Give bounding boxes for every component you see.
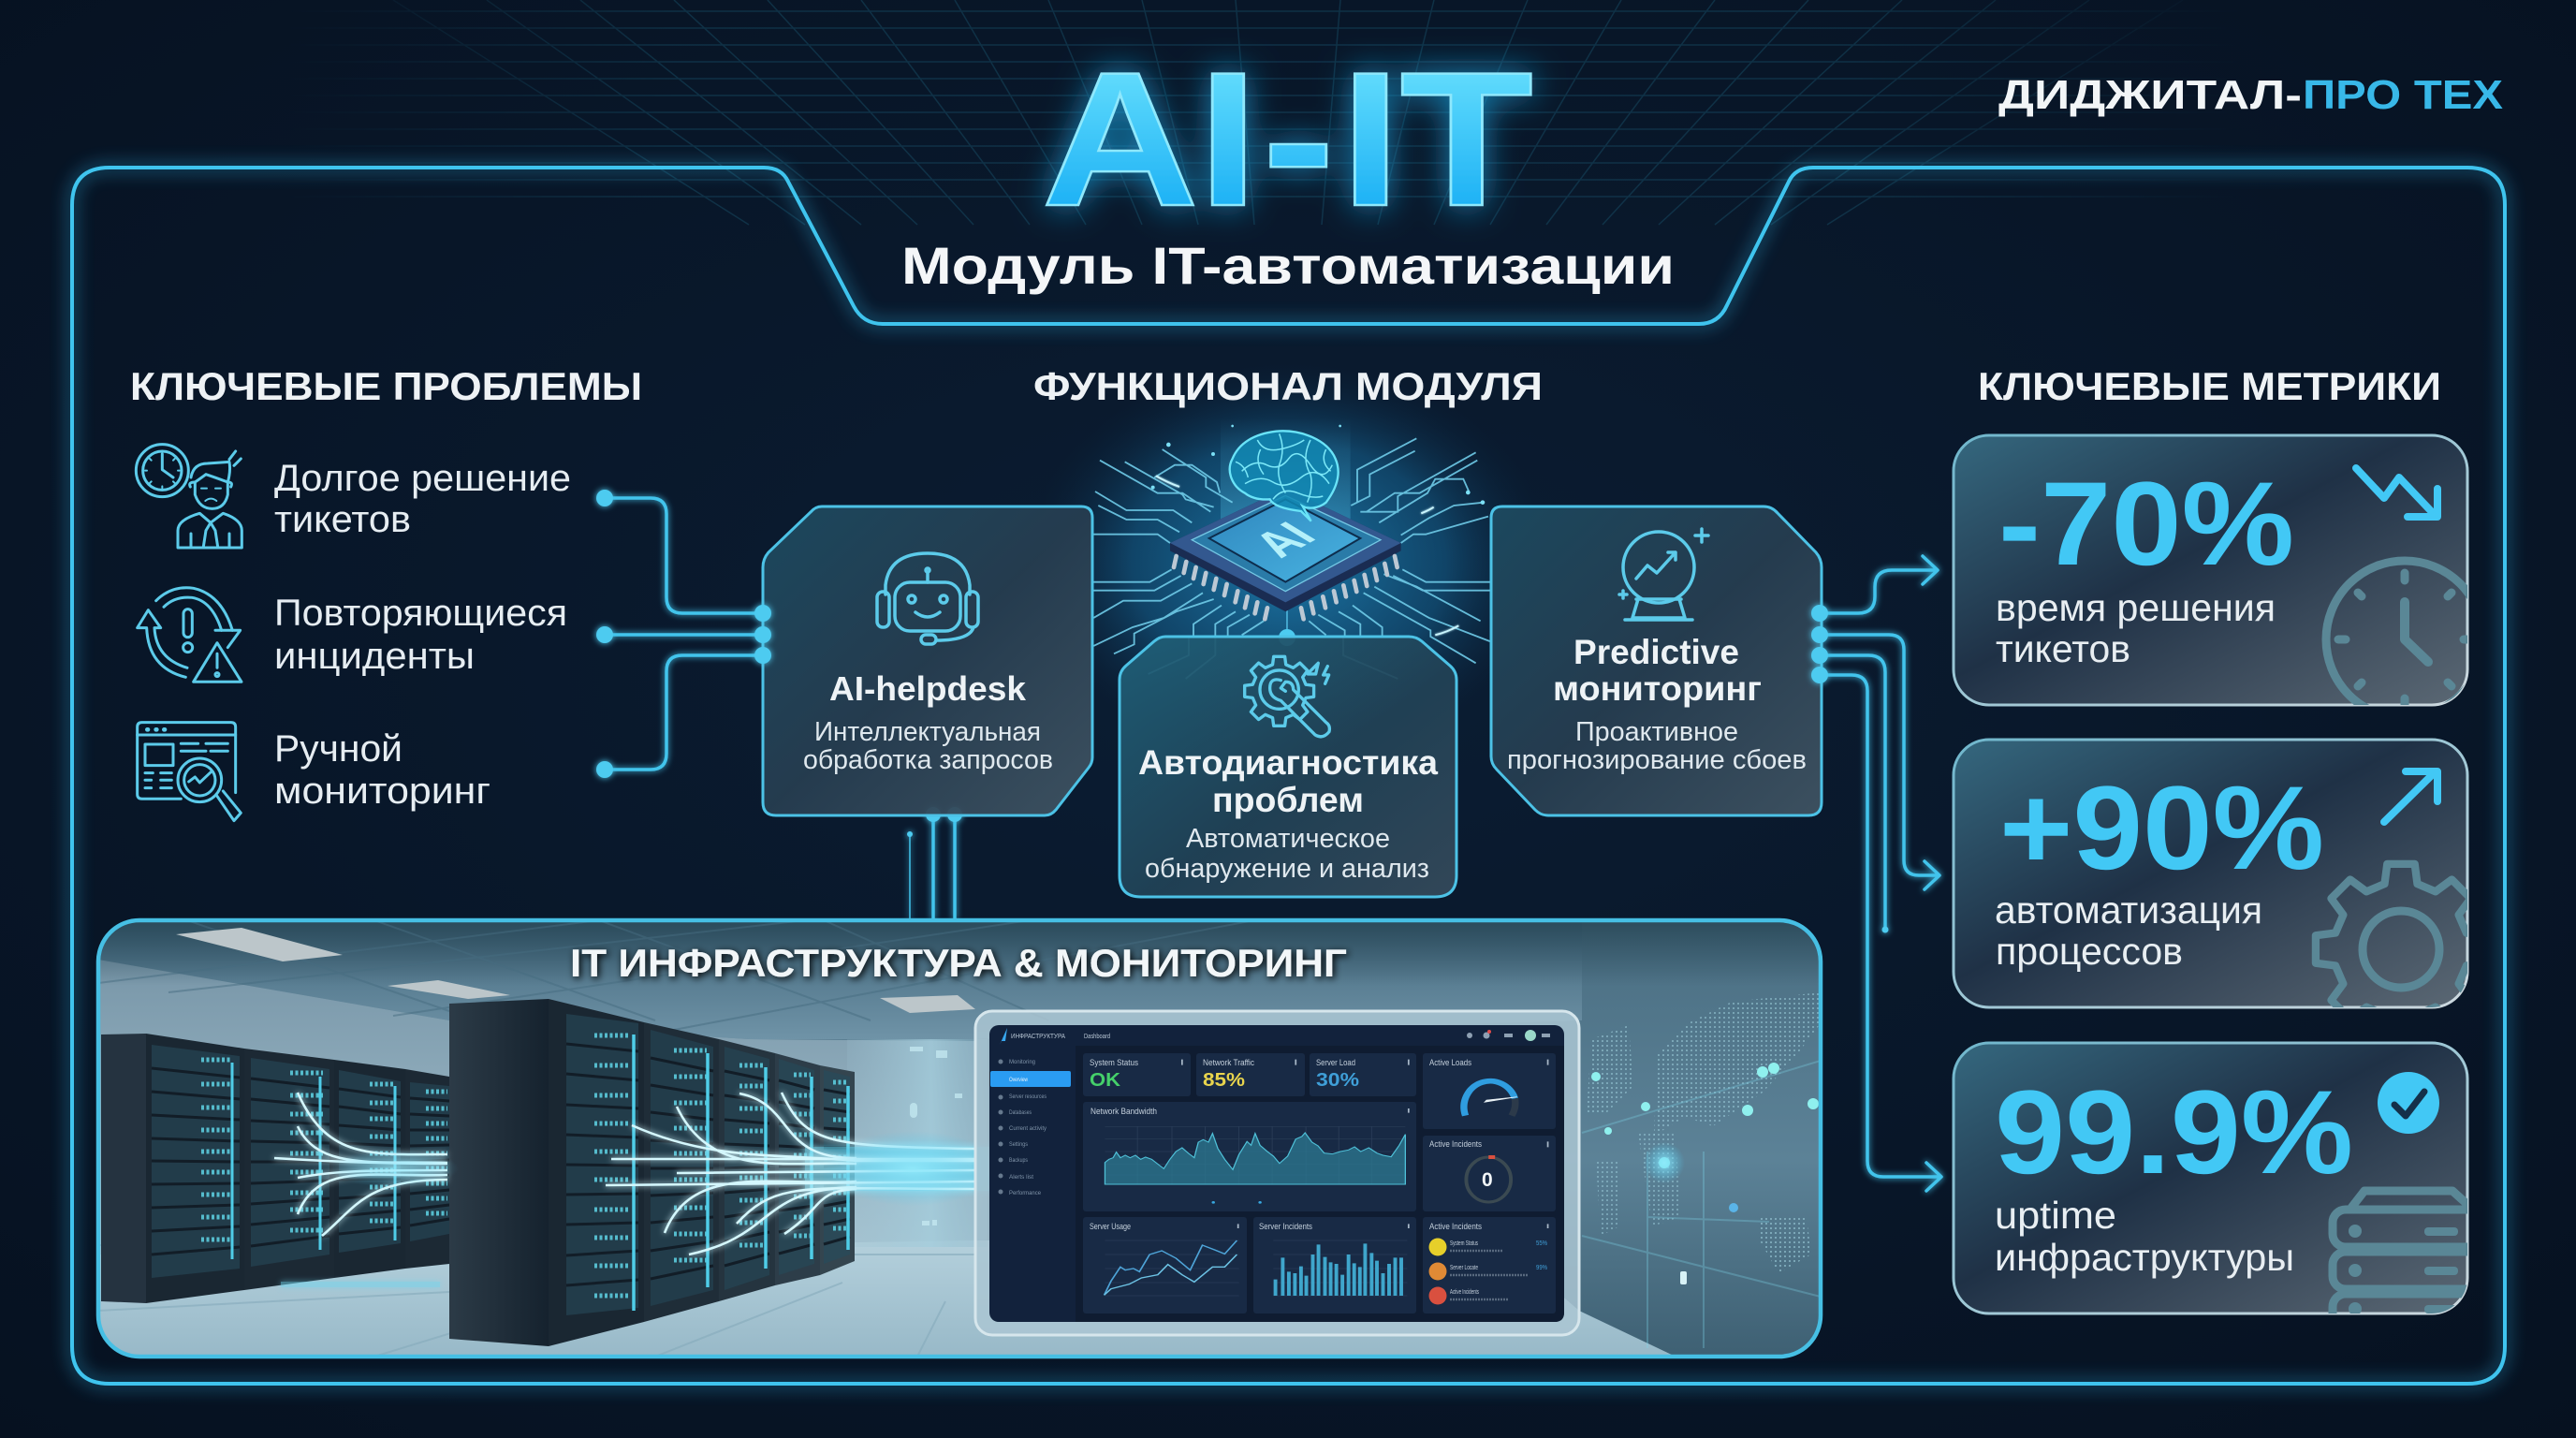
icon: crystal ball chart — [1619, 529, 1708, 620]
value: minus 70 percent: -70% — [1998, 457, 2294, 590]
text: manual monitoring: Ручной — [274, 728, 402, 770]
title: predictive monitoring: мониторинг — [1553, 669, 1762, 708]
dashboard sidebar: Current activity — [1009, 1125, 1047, 1132]
description: predictive monitoring: прогнозирование сбоев — [1507, 745, 1807, 775]
icon: manual monitoring — [138, 723, 241, 821]
data cables — [274, 1093, 975, 1255]
dashboard — [975, 1011, 1579, 1335]
main server row — [449, 999, 855, 1346]
icon: clock and frustrated person — [136, 445, 242, 548]
description: auto-diagnostics: обнаружение и анализ — [1145, 854, 1429, 884]
dashboard labels: Active Incidents — [1429, 1222, 1482, 1231]
dashboard labels: System Status — [1090, 1058, 1138, 1067]
dashboard sidebar: Settings — [1009, 1141, 1029, 1148]
metric card: automation — [1953, 738, 2469, 1009]
left server row — [101, 1034, 449, 1303]
dashboard incident list: 99% — [1536, 1263, 1547, 1271]
icon: recurring incidents — [138, 588, 242, 682]
dashboard sidebar: Server resources — [1009, 1093, 1047, 1100]
illustration: AI chip with brain — [1027, 362, 1551, 761]
dashboard cards — [1083, 1053, 1556, 1313]
label: uptime — [1995, 1194, 2294, 1279]
label: automation — [1995, 888, 2262, 973]
panel: auto-diagnostics — [1120, 637, 1456, 897]
connectors: helpdesk to infrastructure — [907, 807, 962, 919]
text: manual monitoring — [274, 728, 490, 812]
label: ticket time: тикетов — [1996, 627, 2130, 670]
brand: ДИДЖИТАЛ- — [1998, 72, 2302, 118]
label: ticket time: время решения — [1996, 586, 2276, 629]
dashboard sidebar: Overview — [1009, 1077, 1028, 1083]
dashboard labels: Active Incidents — [1429, 1139, 1482, 1149]
dashboard values: 30% — [1316, 1070, 1359, 1091]
watermark: server — [2329, 1187, 2467, 1313]
dashboard sidebar — [990, 1028, 1550, 1196]
panel: IT infrastructure — [98, 920, 1821, 1357]
label: automation: процессов — [1996, 930, 2183, 973]
title: predictive monitoring: Predictive — [1573, 633, 1739, 671]
value: plus 90 percent: +90% — [1999, 761, 2324, 894]
title: AI-helpdesk: AI-helpdesk — [829, 669, 1027, 708]
description: AI-helpdesk: обработка запросов — [803, 745, 1053, 775]
watermark: clock — [2321, 556, 2467, 705]
icon: check badge — [2378, 1072, 2439, 1134]
dashboard sidebar: Dashboard — [1084, 1034, 1110, 1040]
text: recurring incidents: инциденты — [274, 636, 475, 677]
background grid — [392, 0, 2133, 225]
dashboard values: OK — [1090, 1070, 1121, 1091]
text: long ticket resolution — [274, 458, 571, 540]
dashboard labels: Server Usage — [1090, 1222, 1131, 1231]
dashboard sidebar: Performance — [1009, 1190, 1041, 1196]
description: predictive monitoring — [1507, 717, 1807, 775]
main frame — [72, 168, 2505, 1384]
title: auto-diagnostics: Автодиагностика — [1138, 743, 1438, 782]
description: predictive monitoring: Проактивное — [1575, 717, 1738, 747]
heading: key metrics: КЛЮЧЕВЫЕ МЕТРИКИ — [1978, 364, 2441, 408]
subtitle: Модуль IT-автоматизации — [901, 236, 1675, 295]
label: ticket time — [1996, 586, 2276, 670]
dashboard labels — [1090, 1058, 1482, 1231]
description: auto-diagnostics — [1145, 824, 1429, 884]
panel: predictive monitoring — [1491, 506, 1822, 815]
dashboard incident list: System Status — [1450, 1239, 1478, 1247]
description: auto-diagnostics: Автоматическое — [1186, 824, 1390, 854]
dashboard sidebar: Backups — [1009, 1157, 1029, 1164]
holographic world map — [1582, 992, 1821, 1348]
icon: robot headset — [877, 553, 978, 644]
text: long ticket resolution: Долгое решение — [274, 458, 571, 499]
connectors: problems to helpdesk — [596, 490, 763, 778]
dashboard labels: Network Bandwidth — [1090, 1107, 1157, 1116]
connector dots: chip to diagnostics — [1279, 629, 1295, 646]
text: long ticket resolution: тикетов — [274, 499, 411, 540]
dashboard sidebar: Alerts list — [1009, 1174, 1033, 1181]
value: 99.9 percent: 99.9% — [1995, 1065, 2353, 1198]
title: predictive monitoring — [1553, 633, 1762, 708]
icon: down trend arrow — [2356, 468, 2437, 517]
data beam glow — [805, 1147, 992, 1191]
text: recurring incidents — [274, 593, 567, 677]
metric card: ticket time — [1954, 435, 2483, 718]
metric card: uptime — [1954, 1043, 2482, 1331]
brand: ПРО ТЕХ — [2303, 72, 2503, 118]
dashboard incident list: Server Locate — [1450, 1263, 1478, 1271]
dashboard labels: Active Loads — [1429, 1058, 1471, 1067]
title: auto-diagnostics: проблем — [1212, 781, 1364, 819]
description: AI-helpdesk — [803, 717, 1053, 775]
title: IT infrastructure: IT ИНФРАСТРУКТУРА & МОНИТОРИНГ — [570, 941, 1347, 985]
dashboard incident list — [1428, 1238, 1547, 1305]
dashboard labels: Server Incidents — [1259, 1222, 1312, 1231]
label: uptime: uptime — [1995, 1194, 2116, 1237]
dashboard incident list: Active Incidents — [1450, 1287, 1479, 1296]
panel: AI-helpdesk — [763, 506, 1092, 815]
label: uptime: инфраструктуры — [1995, 1236, 2294, 1279]
dashboard sidebar: Databases — [1009, 1109, 1032, 1116]
icon: gear and wrench — [1245, 656, 1329, 737]
illustration: server room — [98, 920, 1821, 1357]
description: AI-helpdesk: Интеллектуальная — [814, 717, 1041, 747]
text: manual monitoring: мониторинг — [274, 770, 490, 812]
dashboard sidebar: Monitoring — [1009, 1059, 1035, 1065]
icon: up trend arrow — [2384, 771, 2437, 822]
dashboard labels: Server Load — [1316, 1058, 1355, 1067]
heading: module features: ФУНКЦИОНАЛ МОДУЛЯ — [1033, 364, 1543, 408]
dashboard incident counter: 0 — [1482, 1169, 1493, 1191]
title: AI-IT — [1042, 33, 1533, 246]
panel border — [98, 920, 1821, 1357]
connector dots: left card — [754, 605, 771, 664]
watermark: gear — [2312, 859, 2467, 1007]
dashboard values — [1090, 1070, 1359, 1091]
dashboard sidebar: ИНФРАСТРУКТУРА — [1011, 1034, 1065, 1040]
dashboard charts — [1105, 1060, 1548, 1296]
dashboard incident list: 55% — [1536, 1239, 1547, 1247]
heading: key problems: КЛЮЧЕВЫЕ ПРОБЛЕМЫ — [130, 364, 642, 408]
illustration: AI chip with brain: AI — [1241, 515, 1327, 565]
dashboard labels: Network Traffic — [1203, 1058, 1254, 1067]
dashboard values: 85% — [1203, 1070, 1245, 1091]
text: recurring incidents: Повторяющиеся — [274, 593, 567, 634]
brand — [1998, 72, 2503, 118]
connectors: predictive to metrics — [1811, 556, 1941, 1191]
label: automation: автоматизация — [1995, 888, 2262, 932]
title: auto-diagnostics — [1138, 743, 1438, 819]
